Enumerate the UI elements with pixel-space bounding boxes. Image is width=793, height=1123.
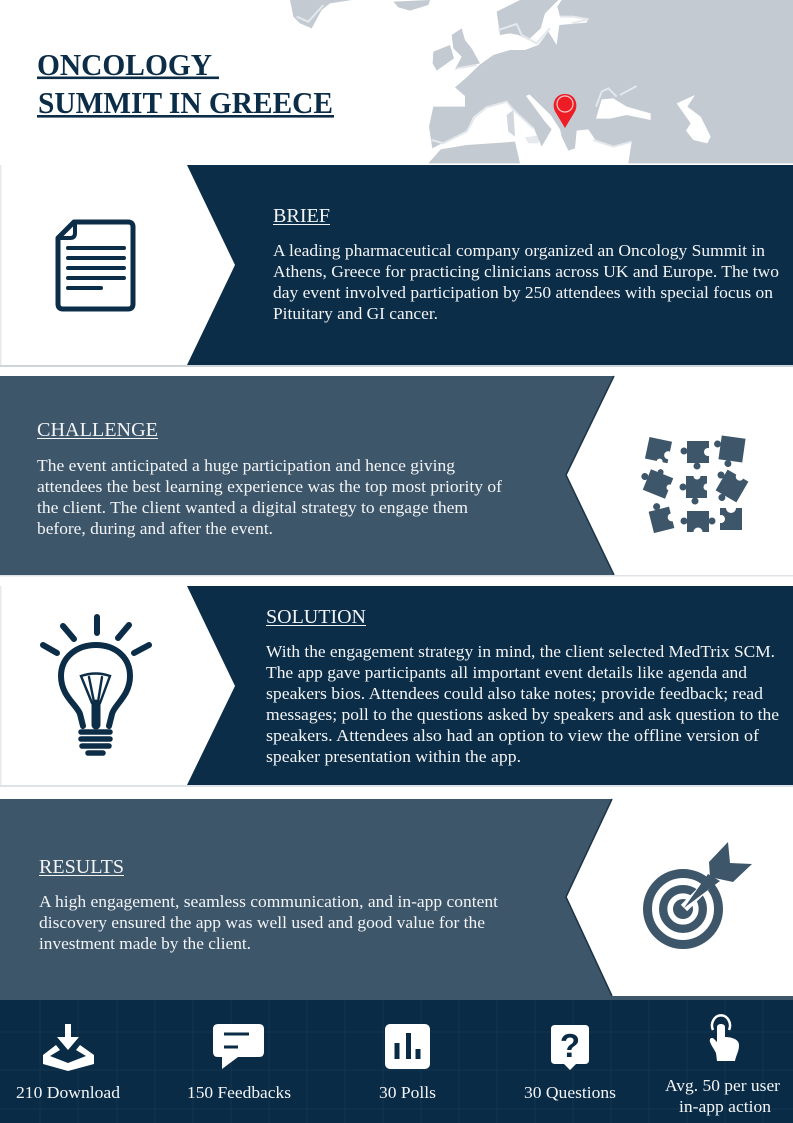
title: SUMMIT IN GREECE	[38, 85, 333, 120]
icon: puzzle pieces	[637, 435, 750, 536]
icon: light bulb	[43, 617, 149, 753]
panel: results	[0, 799, 793, 1000]
icon: document	[58, 222, 133, 309]
text: challenge body: attendees the best learning experience was the top most priority of	[37, 477, 502, 496]
metric: in-app actions: in-app action	[679, 1097, 772, 1116]
text: brief body: Pituitary and GI cancer.	[273, 304, 438, 323]
heading: brief: BRIEF	[273, 205, 330, 227]
metric: polls	[379, 1024, 436, 1102]
heading: challenge: CHALLENGE	[37, 419, 158, 441]
panel: brief	[0, 165, 793, 367]
text: solution body	[266, 642, 779, 766]
metric: questions	[524, 1025, 616, 1102]
header map of Europe	[290, 0, 793, 163]
text: solution body: speakers. Attendees also had an option to view the offline version of	[266, 726, 759, 745]
text: results body: discovery ensured the app was well used and good value for the	[39, 913, 485, 932]
heading: results: RESULTS	[39, 856, 124, 878]
metric: feedbacks	[187, 1024, 291, 1102]
metric: downloads: 210 Download	[16, 1083, 121, 1102]
text: brief body: Athens, Greece for practicing clinicians across UK and Europe. The two	[273, 262, 779, 281]
text: solution body: speakers bios. Attendees could also take notes; provide feedback; read	[266, 684, 764, 703]
panel: solution	[0, 586, 793, 787]
text: results body: A high engagement, seamless communication, and in-app content	[39, 892, 498, 911]
text: brief body: day event involved participation by 250 attendees with special focus on	[273, 283, 773, 302]
text: results body	[39, 892, 498, 953]
metric: questions: 30 Questions	[524, 1083, 616, 1102]
text: results body: investment made by the client.	[39, 934, 251, 953]
panel: metrics footer	[0, 1000, 793, 1123]
text: solution body: messages; poll to the questions asked by speakers and ask question to the	[266, 705, 779, 724]
title	[37, 47, 334, 120]
metric: downloads	[16, 1024, 121, 1102]
metric: feedbacks: 150 Feedbacks	[187, 1083, 291, 1102]
heading: solution: SOLUTION	[266, 606, 366, 628]
text: challenge body: The event anticipated a huge participation and hence giving	[37, 456, 456, 475]
text: challenge body	[37, 456, 502, 538]
icon: target with arrow	[648, 842, 752, 944]
text: challenge body: before, during and after the event.	[37, 519, 273, 538]
metric: questions: ?	[560, 1027, 580, 1064]
panel: challenge	[0, 376, 793, 576]
location pin on Greece	[554, 94, 576, 128]
text: brief body: A leading pharmaceutical company organized an Oncology Summit in	[273, 241, 766, 260]
text: challenge body: the client. The client wanted a digital strategy to engage them	[37, 498, 468, 517]
text: solution body: speaker presentation within the app.	[266, 747, 521, 766]
title: ONCOLOGY	[37, 47, 212, 82]
metric: in-app actions	[665, 1015, 780, 1116]
metric: in-app actions: Avg. 50 per user	[665, 1076, 780, 1095]
text: solution body: The app gave participants all important event details like agenda and	[266, 663, 748, 682]
metric: polls: 30 Polls	[379, 1083, 436, 1102]
text: solution body: With the engagement strategy in mind, the client selected MedTrix SCM.	[266, 642, 775, 661]
text: brief body	[273, 241, 779, 323]
